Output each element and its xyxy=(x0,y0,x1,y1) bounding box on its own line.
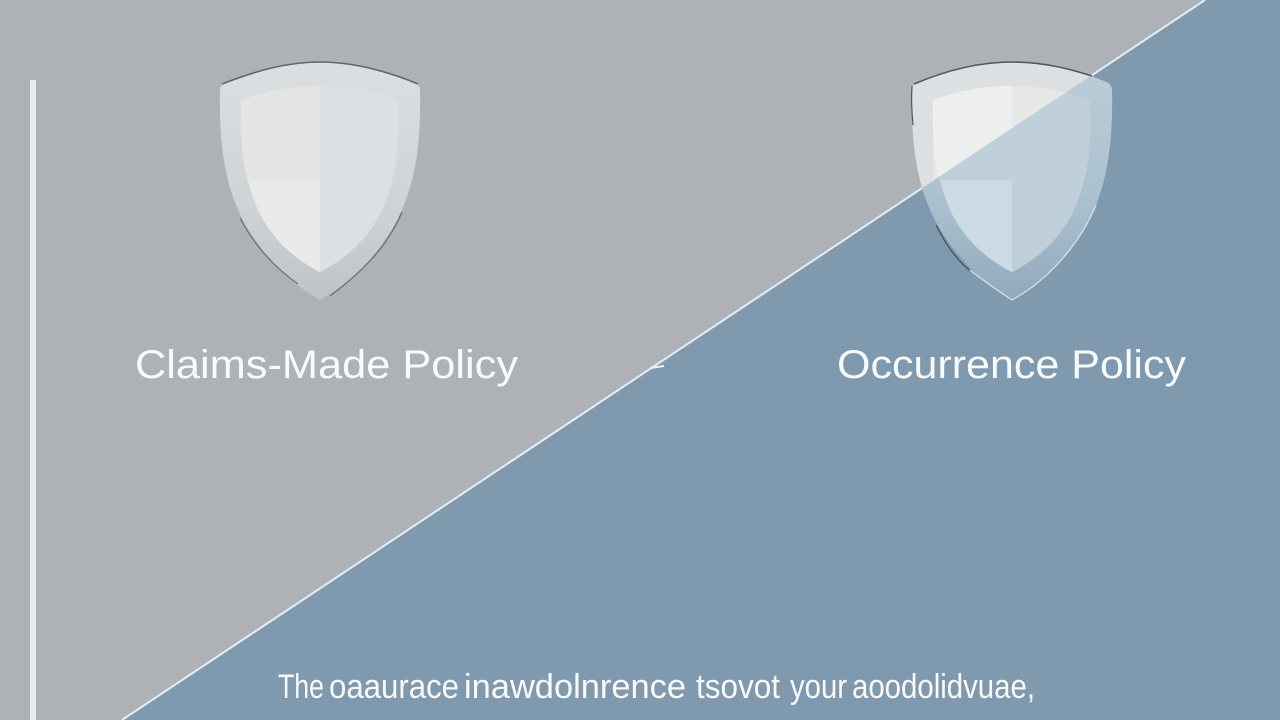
icon: claims-made glass shield xyxy=(220,62,420,300)
divider dash xyxy=(650,366,664,368)
icon: occurrence glass shield xyxy=(912,62,1112,300)
heading: Occurrence Policy: Occurrence Policy xyxy=(837,343,1186,387)
vertical accent bar xyxy=(30,80,36,720)
caption text: oaaurace xyxy=(329,668,459,706)
caption text: your xyxy=(790,668,847,706)
caption text: The xyxy=(278,668,324,706)
caption text: tsovot xyxy=(696,668,781,706)
caption text: inawdolnrence xyxy=(464,668,686,706)
caption text: aoodolidvuae, xyxy=(852,668,1035,706)
heading: Claims-Made Policy: Claims-Made Policy xyxy=(135,343,518,387)
